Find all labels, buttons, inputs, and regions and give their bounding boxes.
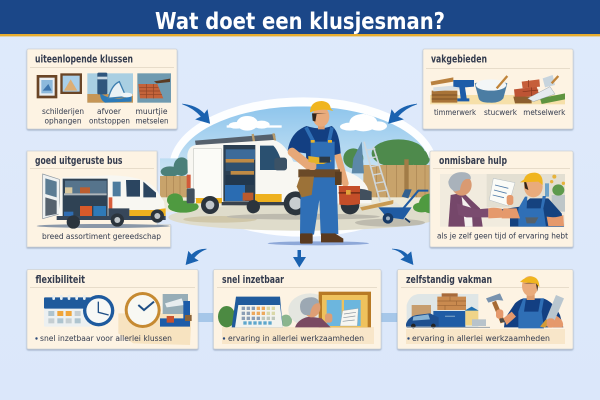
panel: uiteenlopende klussen: ophangen bbox=[44, 116, 82, 126]
heading: goed uitgeruste bus bbox=[35, 156, 122, 167]
panel: zelfstandig vakman: ervaring in allerlei werkzaamheden bbox=[412, 333, 550, 343]
panel: snel inzetbaar bbox=[214, 270, 381, 349]
icons bbox=[37, 73, 171, 103]
caption: breed assortiment gereedschap bbox=[42, 231, 161, 241]
clouds bbox=[227, 114, 387, 131]
panel: uiteenlopende klussen bbox=[27, 49, 177, 129]
arrow: top right bbox=[389, 104, 417, 123]
heading: vakgebieden bbox=[431, 54, 487, 66]
panel: vakgebieden: metselwerk bbox=[523, 107, 566, 117]
van illustration bbox=[37, 174, 170, 229]
panel: flexibiliteit: snel inzetbaar voor allerlei klussen bbox=[40, 333, 172, 343]
labels: timmerwerk bbox=[434, 107, 476, 117]
title: Wat doet een klusjesman? bbox=[155, 9, 445, 35]
labels: schilderijen bbox=[42, 106, 84, 116]
van bbox=[187, 133, 372, 215]
heading: snel inzetbaar bbox=[222, 275, 284, 286]
handshake illustration bbox=[440, 172, 565, 227]
white halo bbox=[169, 97, 437, 237]
panel: onmisbare hulp bbox=[430, 151, 573, 247]
header banner bbox=[0, 0, 600, 36]
panel: goed uitgeruste bus bbox=[27, 151, 170, 247]
fences bbox=[160, 165, 430, 198]
calendar and window illustration bbox=[218, 292, 371, 327]
trees bbox=[343, 139, 430, 168]
panel: uiteenlopende klussen: ontstoppen bbox=[89, 116, 130, 126]
ladder bbox=[364, 142, 390, 202]
handyman bbox=[268, 101, 369, 245]
caption bbox=[35, 337, 38, 340]
panel: uiteenlopende klussen: metselen bbox=[136, 116, 168, 126]
arrow: top left bbox=[182, 104, 210, 123]
central scene: handyman with van bbox=[160, 97, 444, 245]
panel: vakgebieden: stucwerk bbox=[484, 107, 517, 117]
calendar and clock icons bbox=[44, 292, 192, 345]
heading: onmisbare hulp bbox=[439, 156, 507, 167]
caption bbox=[223, 337, 225, 340]
heading: uiteenlopende klussen bbox=[35, 54, 133, 66]
panel: uiteenlopende klussen: muurtjie bbox=[136, 106, 168, 116]
icons bbox=[430, 75, 565, 104]
bushes bbox=[167, 193, 444, 213]
panel: zelfstandig vakman bbox=[398, 270, 573, 349]
heading: flexibiliteit bbox=[36, 275, 85, 286]
panel: uiteenlopende klussen: afvoer bbox=[97, 106, 122, 116]
caption: als je zelf geen tijd of ervaring hebt bbox=[437, 230, 569, 240]
ground bbox=[168, 204, 438, 231]
panel: flexibiliteit bbox=[27, 270, 198, 349]
arrow: bottom right bbox=[392, 249, 413, 264]
arrow: bottom left bbox=[186, 249, 206, 264]
caption bbox=[407, 337, 410, 340]
panel: vakgebieden bbox=[423, 49, 573, 129]
arrow: bottom centre bbox=[293, 250, 306, 268]
wheelbarrow bbox=[360, 189, 428, 224]
craftsman illustration bbox=[406, 276, 564, 328]
connector bars bbox=[197, 313, 398, 322]
heading: zelfstandig vakman bbox=[406, 275, 492, 286]
panel: snel inzetbaar: ervaring in allerlei werkzaamheden bbox=[228, 333, 364, 343]
